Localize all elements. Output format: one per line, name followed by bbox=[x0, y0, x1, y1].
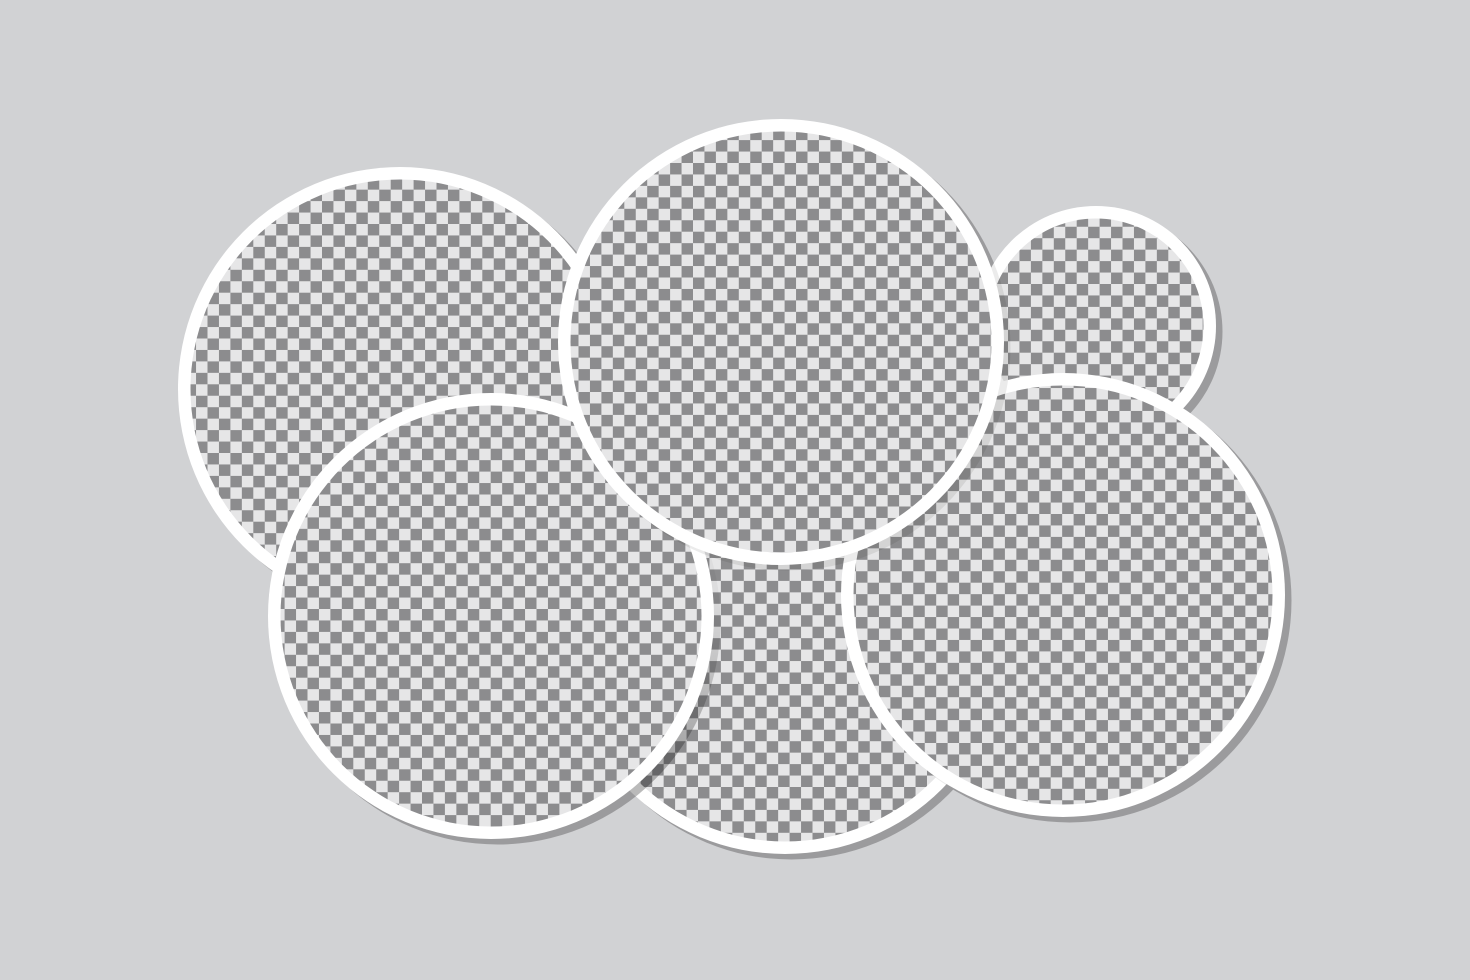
frame: lower right circle bbox=[841, 373, 1292, 822]
frame: top center circle bbox=[558, 119, 1010, 570]
frame: upper left circle bbox=[178, 167, 622, 611]
frame: upper right small circle bbox=[976, 206, 1216, 446]
frame: bottom center circle bbox=[563, 410, 1007, 854]
drop shadows on background bbox=[184, 124, 1292, 860]
photo frame cloud collage bbox=[178, 119, 1292, 860]
frame: lower left circle bbox=[268, 393, 720, 844]
